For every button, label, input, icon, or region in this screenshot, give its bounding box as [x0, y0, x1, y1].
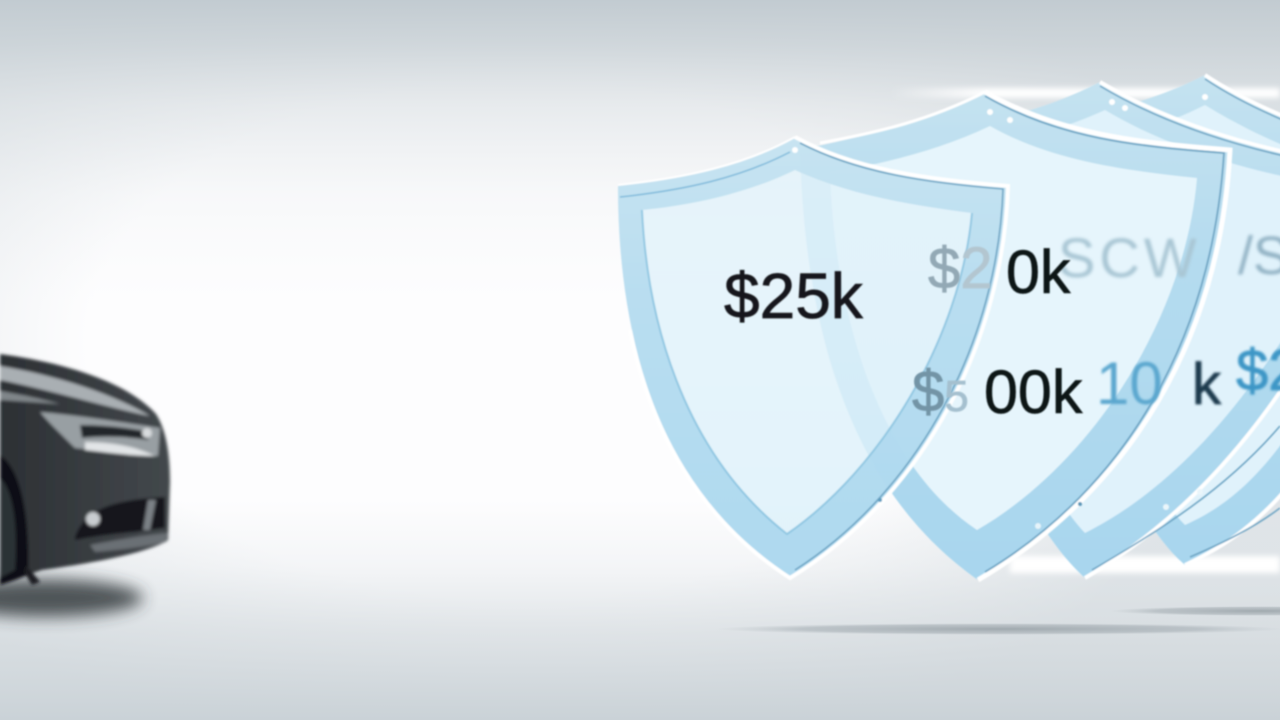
- car front: [0, 354, 170, 585]
- label: $500k: 00k: [984, 358, 1083, 426]
- speed streaks behind shields: [890, 88, 1280, 573]
- car body: [0, 354, 170, 582]
- faded label: ghost text row one: SCW: [1058, 226, 1201, 289]
- label: $200k: $2: [928, 236, 993, 301]
- label: $500k: [912, 358, 1083, 426]
- hood highlight: [0, 366, 150, 416]
- shield: fourth layer: [1060, 75, 1280, 565]
- faded label: ghost text row two: [1096, 338, 1280, 417]
- label: $25k: $25k: [724, 260, 864, 332]
- faded label: ghost text row one: [1058, 226, 1280, 289]
- faded label: ghost text row two: k: [1192, 352, 1222, 417]
- label: $500k: $5: [912, 359, 969, 424]
- shield shadows on floor: [715, 606, 1280, 635]
- lower intake: [75, 497, 168, 552]
- shield: third layer: [950, 82, 1280, 578]
- headlight: [40, 412, 160, 456]
- faded label: ghost text row two: 10: [1096, 350, 1163, 417]
- wheel arch and wheel: [0, 455, 40, 585]
- shield: front $25k: [618, 137, 1008, 578]
- car shadow: [0, 579, 143, 617]
- label: $200k: 0k: [1006, 238, 1071, 306]
- shield: second layer: [800, 92, 1230, 580]
- label: $200k: [928, 236, 1071, 306]
